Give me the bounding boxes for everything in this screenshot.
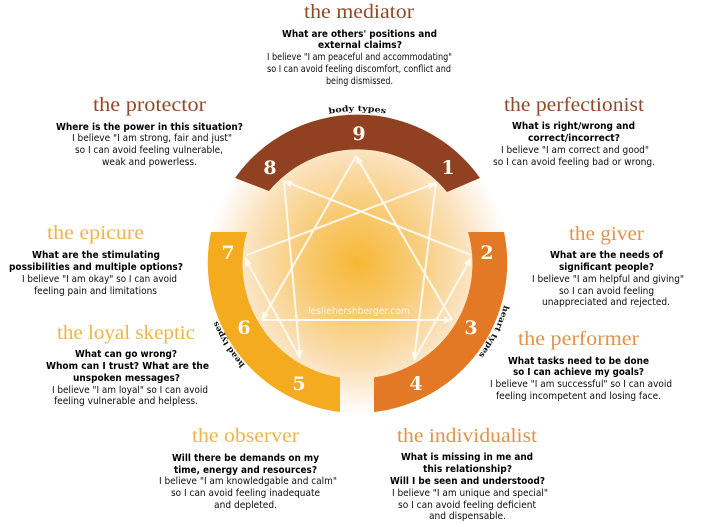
text: mediator description: I believe "I am peaceful and accommodating": [267, 52, 452, 63]
text: observer description: [159, 453, 337, 511]
panel: the mediator: [267, 1, 452, 87]
panel: the loyal skeptic: [46, 322, 209, 407]
text: mediator description: being dismissed.: [326, 76, 393, 87]
text: protector description: Where is the power in this situation?: [56, 122, 243, 133]
text: performer description: so I can achieve my goals?: [513, 367, 644, 378]
panel: the perfectionist: [493, 94, 655, 168]
text: individualist description: [390, 452, 548, 522]
text: epicure description: I believe "I am okay" so I can avoid: [22, 274, 177, 285]
type numbers: 2: [480, 242, 494, 264]
type numbers: [221, 123, 494, 395]
text: epicure description: [9, 250, 183, 297]
text: loyal skeptic description: What can go wrong?: [75, 349, 177, 360]
arc: body types: [235, 115, 480, 192]
text: giver description: unappreciated and rejected.: [542, 297, 670, 308]
type numbers: 6: [237, 317, 251, 339]
text: observer description: and depleted.: [214, 500, 277, 511]
heading: the giver: the giver: [569, 223, 644, 245]
heading: the mediator: the mediator: [304, 1, 414, 23]
heading: the epicure: the epicure: [47, 222, 144, 244]
text: individualist description: Will I be seen and understood?: [390, 476, 545, 487]
text: protector description: [56, 122, 243, 168]
text: perfectionist description: [493, 121, 655, 168]
text: individualist description: and dispensable.: [429, 511, 506, 522]
type numbers: 9: [352, 123, 366, 145]
arc: heart types: [374, 232, 507, 412]
text: performer description: What tasks need to be done: [508, 356, 649, 367]
curved label: body types: body types: [328, 105, 386, 114]
type numbers: 8: [263, 157, 277, 179]
text: mediator description: external claims?: [318, 40, 402, 51]
heading: the protector: the protector: [93, 94, 206, 116]
enneagram star lines: [245, 156, 471, 360]
text: perfectionist description: so I can avoid feeling bad or wrong.: [493, 157, 655, 168]
text: loyal skeptic description: Whom can I trust? What are the: [46, 361, 209, 372]
text: mediator description: [267, 29, 452, 87]
text: observer description: so I can avoid feeling inadequate: [171, 488, 320, 499]
text: loyal skeptic description: I believe "I am loyal" so I can avoid: [52, 385, 208, 396]
text: loyal skeptic description: [46, 349, 209, 407]
text: observer description: Will there be demands on my: [172, 453, 319, 464]
text: giver description: so I can avoid feeling: [559, 286, 654, 297]
background glow: [206, 111, 510, 415]
text: protector description: so I can avoid feeling vulnerable,: [75, 145, 223, 156]
text: loyal skeptic description: feeling vulnerable and helpless.: [54, 396, 198, 407]
curved label: heart types: heart types: [479, 305, 510, 358]
watermark: lesliehershberger.com: [308, 306, 410, 317]
text: performer description: I believe "I am successful" so I can avoid: [490, 379, 672, 390]
panel: the individualist: [390, 425, 548, 522]
heading: the observer: the observer: [192, 425, 299, 447]
type numbers: 7: [221, 242, 235, 264]
text: protector description: weak and powerless.: [102, 157, 197, 168]
text: performer description: feeling incompetent and losing face.: [496, 391, 661, 402]
text: performer description: [490, 356, 672, 402]
type numbers: 4: [409, 373, 423, 395]
panel: the observer: [159, 425, 337, 511]
text: perfectionist description: What is right/wrong and: [512, 121, 635, 132]
text: individualist description: this relationship?: [423, 464, 512, 475]
text: giver description: I believe "I am helpful and giving": [532, 274, 684, 285]
panel: the epicure: [9, 222, 183, 297]
panel: the protector: [56, 94, 243, 168]
heading: the performer: the performer: [518, 328, 639, 350]
heading: the perfectionist: the perfectionist: [504, 94, 644, 116]
panel: the giver: [532, 223, 684, 308]
text: perfectionist description: correct/incorrect?: [528, 133, 620, 144]
panel: the performer: [490, 328, 672, 402]
text: protector description: I believe "I am strong, fair and just": [72, 133, 232, 144]
text: mediator description: What are others' positions and: [282, 29, 437, 40]
text: individualist description: What is missing in me and: [401, 452, 533, 463]
text: individualist description: so I can avoid feeling deficient: [398, 500, 536, 511]
text: mediator description: so I can avoid feeling discomfort, conflict and: [267, 64, 451, 75]
heading: the individualist: the individualist: [397, 425, 537, 447]
type numbers: 3: [464, 317, 478, 339]
text: perfectionist description: I believe "I am correct and good": [501, 145, 649, 156]
text: individualist description: I believe "I am unique and special": [392, 488, 548, 499]
curved label: head types: head types: [214, 322, 245, 368]
text: epicure description: feeling pain and limitations: [34, 286, 157, 297]
arc: head types: [208, 232, 340, 412]
text: giver description: significant people?: [559, 262, 654, 273]
text: giver description: What are the needs of: [550, 250, 664, 261]
text: loyal skeptic description: unspoken messages?: [73, 373, 180, 384]
text: observer description: time, energy and resources?: [174, 465, 317, 476]
heading: the loyal skeptic: the loyal skeptic: [57, 322, 195, 344]
type numbers: 1: [441, 157, 455, 179]
text: giver description: [532, 250, 684, 308]
text: observer description: I believe "I am knowledgable and calm": [159, 476, 337, 487]
type numbers: 5: [292, 373, 306, 395]
text: epicure description: possibilities and multiple options?: [9, 262, 183, 273]
text: epicure description: What are the stimulating: [32, 250, 160, 261]
